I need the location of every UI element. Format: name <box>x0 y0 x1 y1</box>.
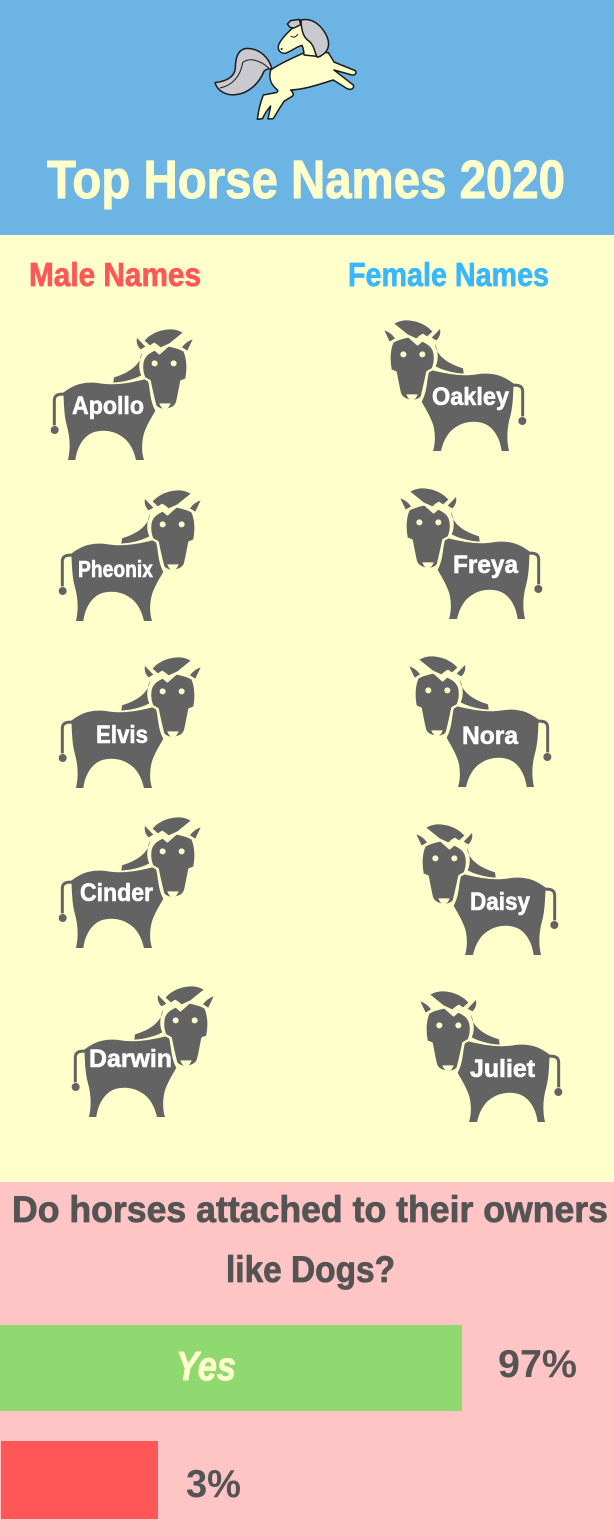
horse: Elvis <box>59 657 201 788</box>
horse: Daisy: Daisy <box>470 888 530 916</box>
horse: Freya: Freya <box>453 551 519 579</box>
horse: Juliet <box>420 991 562 1122</box>
heading: male names: Male Names <box>29 256 201 293</box>
bar: no 3% <box>1 1441 158 1519</box>
value: 97%: 97% <box>498 1343 577 1386</box>
question heading: like Dogs? <box>226 1249 395 1290</box>
heading: female names: Female Names <box>348 256 549 293</box>
horse: Cinder <box>59 817 201 948</box>
header band <box>0 0 614 235</box>
panel: horse names background <box>0 235 614 1182</box>
horse: Oakley: Oakley <box>432 383 509 411</box>
horse: Oakley <box>384 320 526 451</box>
bar label: Yes: Yes <box>176 1343 236 1389</box>
horse: Elvis: Elvis <box>96 721 148 749</box>
value: 3%: 3% <box>186 1463 241 1506</box>
panel: survey background <box>0 1182 614 1536</box>
question heading <box>12 1189 608 1290</box>
horse: Nora <box>409 656 551 787</box>
horse: Apollo: Apollo <box>72 392 144 420</box>
horse: Daisy <box>416 824 558 955</box>
horse: Cinder: Cinder <box>80 879 153 907</box>
horse: Pheonix <box>59 490 201 621</box>
horse: Apollo <box>51 329 193 460</box>
horse: Juliet: Juliet <box>470 1055 536 1083</box>
horse: Freya <box>400 488 542 619</box>
horse: Darwin: Darwin <box>89 1045 172 1073</box>
icon: leaping cream horse <box>215 19 356 119</box>
horse: Darwin <box>72 986 214 1117</box>
horse: Pheonix: Pheonix <box>78 556 153 582</box>
horse: Nora: Nora <box>462 722 519 750</box>
question heading: Do horses attached to their owners <box>12 1189 608 1230</box>
bar: yes 97% <box>0 1325 462 1411</box>
